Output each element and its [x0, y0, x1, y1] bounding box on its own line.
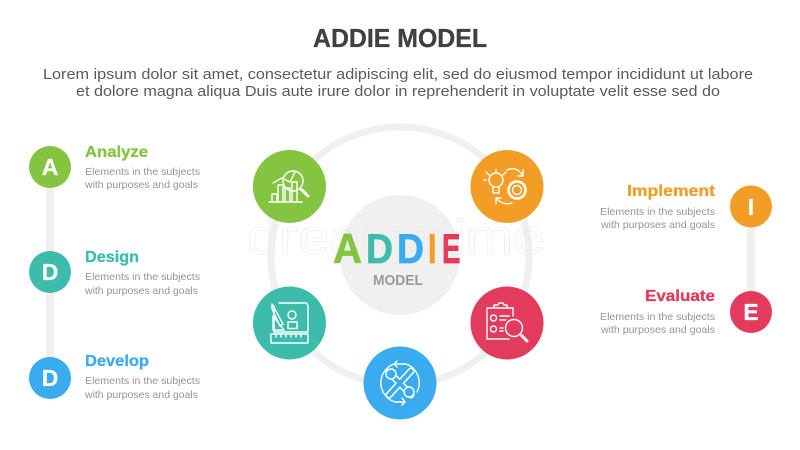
text: design: Elements in the subjects	[85, 271, 200, 283]
centre badge	[340, 195, 460, 315]
text: evaluate	[600, 288, 715, 336]
text: design	[84, 249, 200, 297]
intro paragraph: et dolore magna aliqua Duis aute irure dolor in reprehenderit in voluptate velit esse sed do	[76, 83, 720, 100]
centre word ADDIE: A	[333, 225, 362, 272]
text: develop: with purposes and goals	[84, 389, 198, 401]
text: implement: Implement	[627, 183, 715, 200]
centre word ADDIE: E	[442, 225, 460, 272]
text: develop: Develop	[85, 353, 149, 370]
centre word ADDIE: D	[397, 225, 424, 272]
badge D design: D	[42, 259, 58, 285]
centre word ADDIE: I	[428, 225, 436, 272]
watermark: dreamstime	[247, 209, 545, 265]
text: analyze: with purposes and goals	[84, 179, 198, 191]
text: implement: Elements in the subjects	[600, 206, 715, 218]
centre word ADDIE	[333, 225, 460, 272]
text: design: with purposes and goals	[84, 285, 198, 297]
badge A: A	[42, 154, 58, 180]
text: evaluate: Evaluate	[645, 288, 715, 305]
icon disc: develop	[364, 346, 436, 420]
icon disc: analyze	[253, 150, 326, 223]
text: implement: with purposes and goals	[600, 219, 715, 231]
icon disc: evaluate	[470, 286, 544, 360]
timeline right	[730, 186, 772, 333]
text: develop: Elements in the subjects	[85, 375, 200, 387]
text: design: Design	[85, 249, 139, 266]
icon disc: design	[253, 286, 326, 360]
text: implement	[600, 183, 715, 231]
text: analyze: Analyze	[85, 144, 148, 161]
badge E	[730, 291, 772, 333]
intro paragraph: Lorem ipsum dolor sit amet, consectetur adipiscing elit, sed do eiusmod tempor incididunt ut labore	[43, 66, 753, 83]
badge I: I	[748, 194, 754, 220]
timeline left	[29, 146, 71, 399]
large ring	[271, 127, 529, 385]
text: analyze: Elements in the subjects	[85, 166, 200, 178]
badge D develop	[29, 357, 71, 399]
text: evaluate: Elements in the subjects	[600, 311, 715, 323]
centre word MODEL: MODEL	[373, 273, 423, 289]
text: develop	[84, 353, 200, 401]
badge D develop: D	[42, 365, 58, 391]
text: evaluate: with purposes and goals	[600, 324, 715, 336]
badge E: E	[743, 299, 759, 325]
badge I	[730, 186, 772, 228]
icon disc: implement	[470, 150, 544, 223]
text: analyze	[84, 144, 200, 191]
badge A	[29, 146, 71, 188]
title: ADDIE MODEL	[313, 23, 487, 53]
centre word ADDIE: D	[366, 225, 393, 272]
intro paragraph	[43, 66, 753, 100]
badge D design	[29, 251, 71, 293]
